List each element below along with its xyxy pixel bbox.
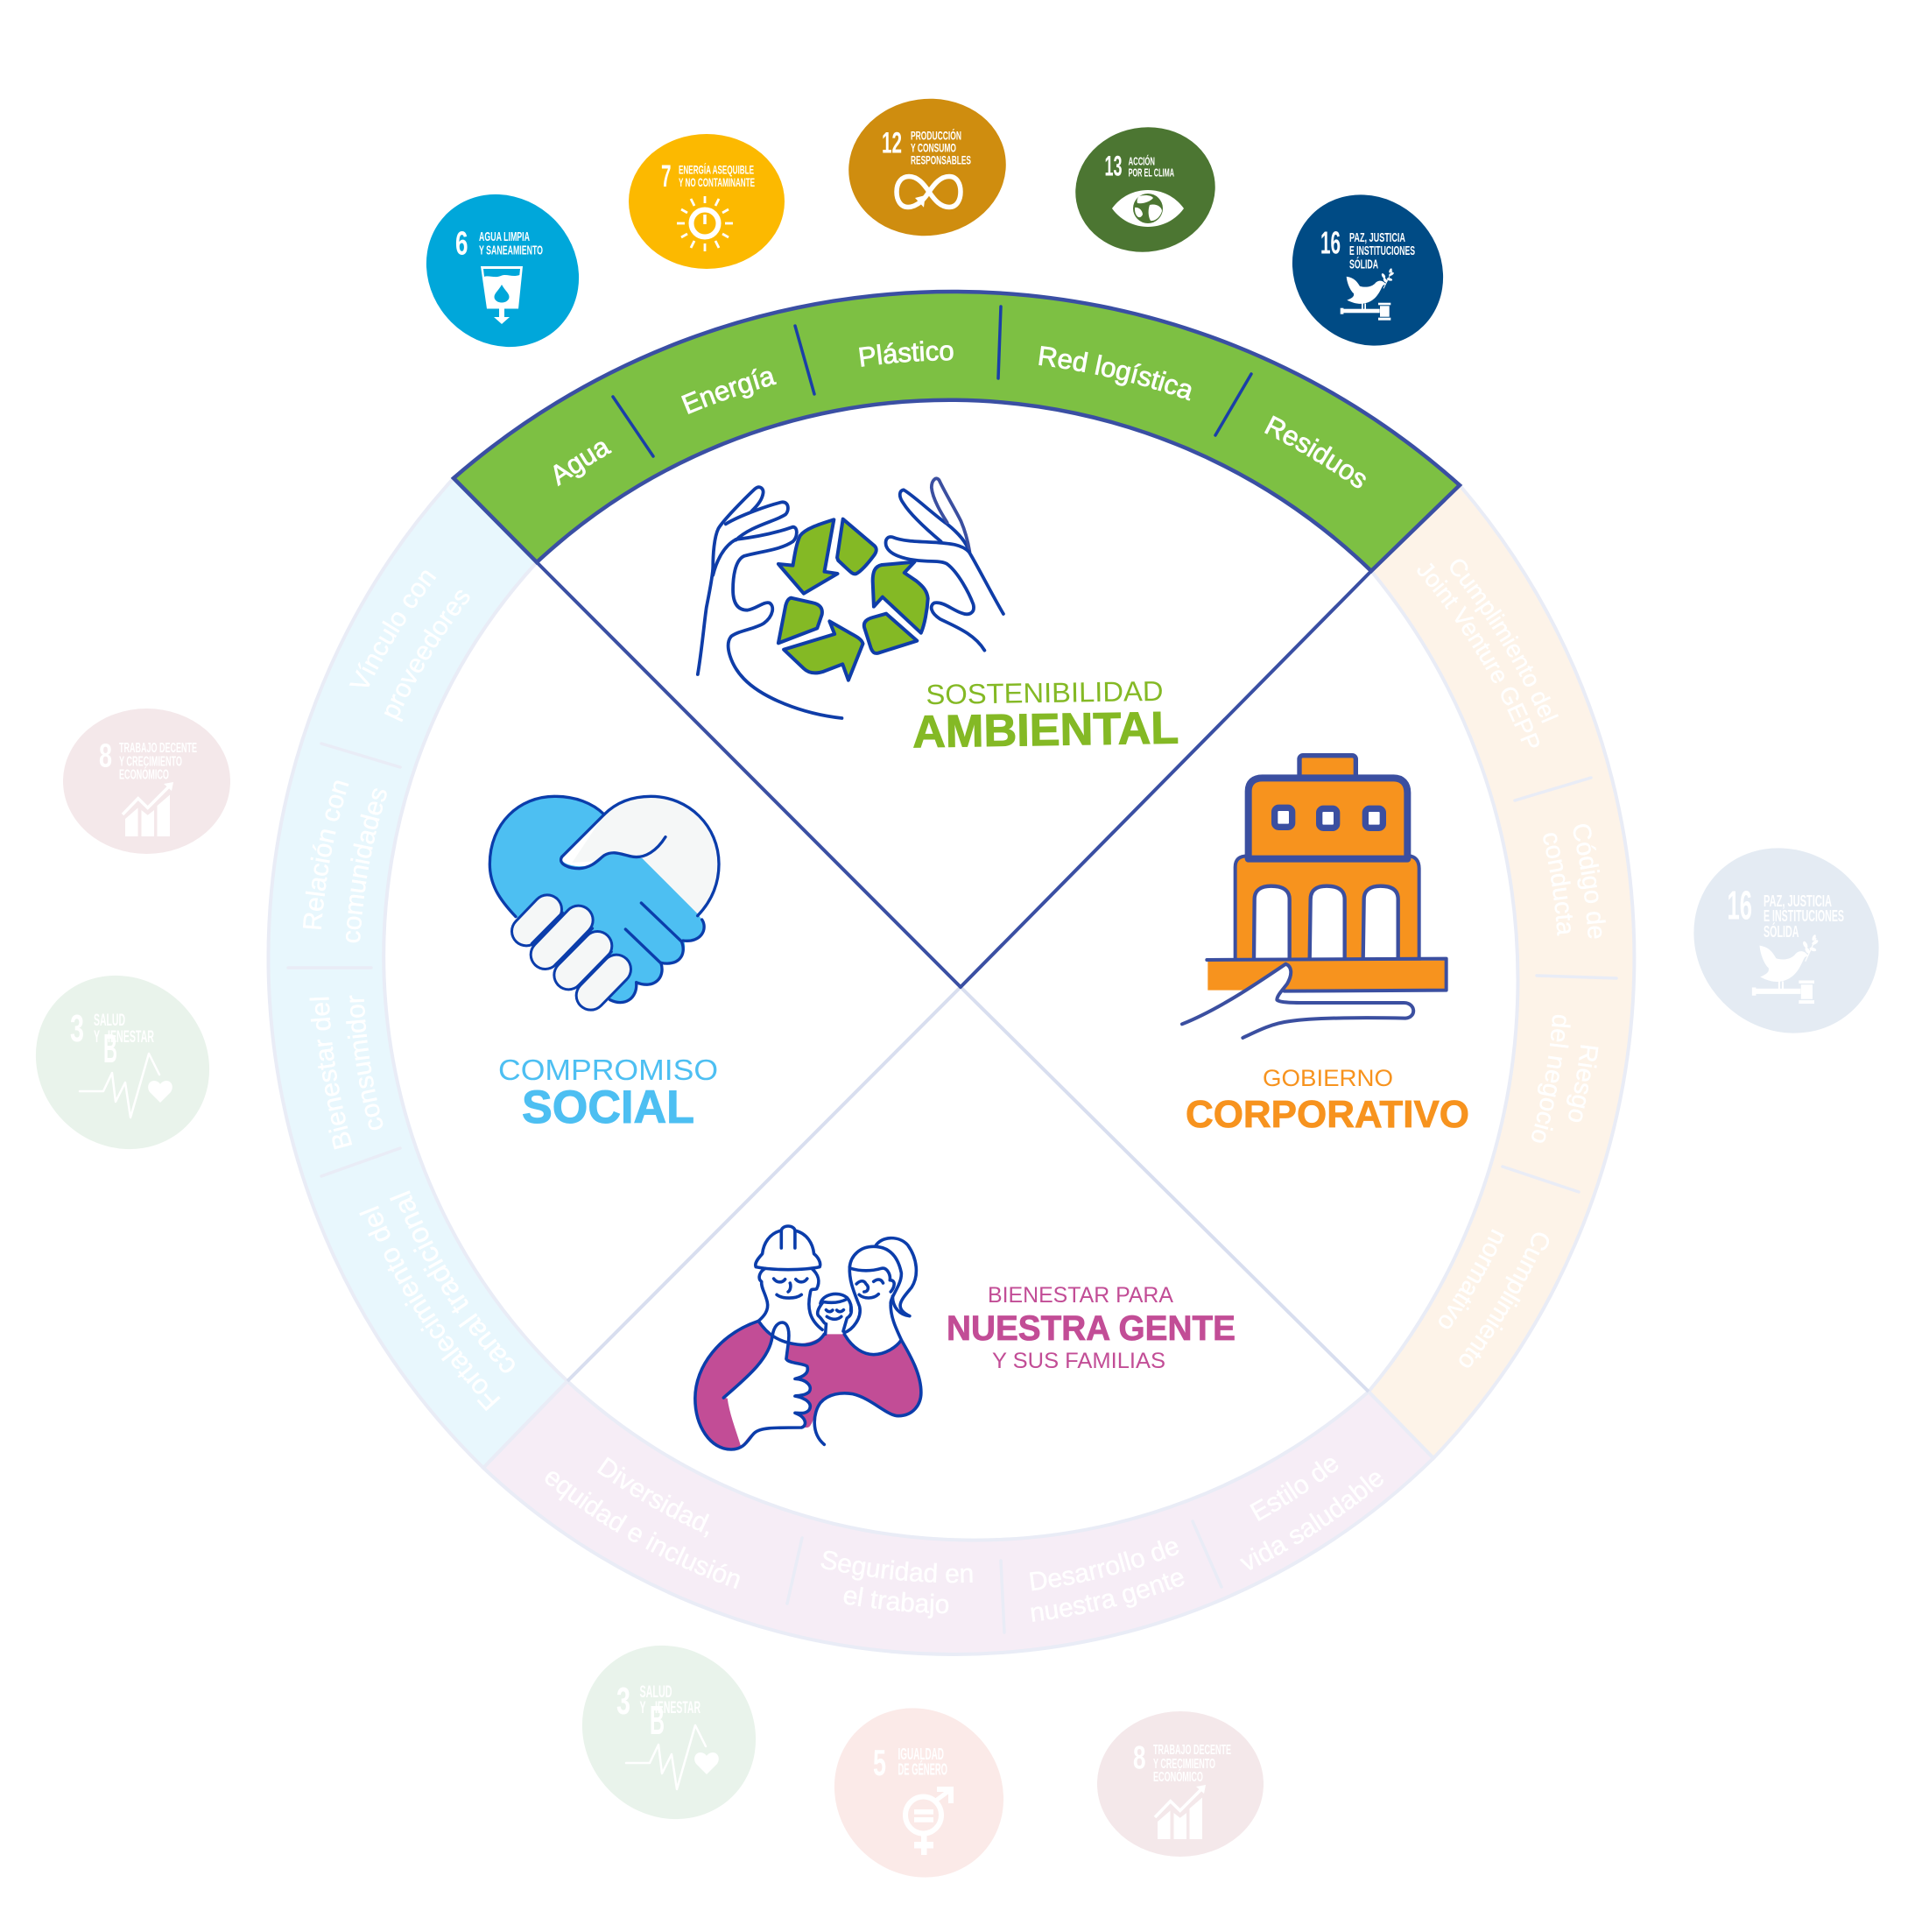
band: gobierno corporativo (faded): Joint Venture GEPP bbox=[1417, 562, 1539, 748]
heading: bienestar para nuestra gente: NUESTRA GENTE bbox=[947, 1309, 1236, 1348]
badge: SDG 8 bottom: ECONÓMICO bbox=[1153, 1768, 1203, 1785]
badge: SDG 7: Y NO CONTAMINANTE bbox=[679, 175, 755, 189]
badge: SDG 13 bbox=[1066, 116, 1225, 263]
recycling arrows bbox=[778, 519, 928, 680]
heading: sostenibilidad ambiental bbox=[912, 675, 1179, 758]
badge: SDG 16 right: PAZ, JUSTICIA bbox=[1764, 892, 1832, 910]
badge: SDG 16: PAZ, JUSTICIA bbox=[1349, 231, 1405, 245]
blue hand bbox=[489, 796, 704, 1003]
illustration: building on a hand bbox=[1182, 756, 1447, 1038]
badge: SDG 6: Y SANEAMIENTO bbox=[479, 243, 543, 257]
band: nuestra gente (faded): equidad e inclusión bbox=[545, 1471, 740, 1589]
gray hand bbox=[572, 796, 719, 916]
badge: SDG 12: RESPONSABLES bbox=[911, 154, 971, 166]
badge: SDG 8 left: ECONÓMICO bbox=[119, 766, 169, 783]
heading: bienestar para nuestra gente bbox=[947, 1283, 1236, 1373]
hands outline bbox=[698, 478, 1003, 718]
band: sostenibilidad ambiental (active): Plástico bbox=[859, 341, 954, 367]
illustration: hands holding recycling arrows bbox=[698, 478, 1003, 718]
heading: compromiso social: COMPROMISO bbox=[498, 1054, 718, 1086]
heading: gobierno corporativo: CORPORATIVO bbox=[1186, 1093, 1469, 1136]
shirts bbox=[695, 1321, 921, 1449]
badge: SDG 7 bbox=[629, 134, 785, 269]
badge: SDG 13: ACCIÓN bbox=[1129, 155, 1155, 168]
badge: SDG 3 bottom: IENESTAR bbox=[655, 1699, 700, 1717]
band: sostenibilidad ambiental (active) bbox=[450, 289, 1462, 574]
tower cap bbox=[1299, 756, 1355, 779]
heading: bienestar para nuestra gente: Y SUS FAMILIAS bbox=[992, 1349, 1165, 1373]
badge: SDG 8 left: Y CRECIMIENTO bbox=[119, 755, 182, 769]
badge: SDG 8 bottom: 8 bbox=[1133, 1739, 1145, 1775]
badge: SDG 16 bbox=[1261, 164, 1475, 377]
illustration: handshake heart bbox=[489, 796, 719, 1003]
badge: SDG 16: E INSTITUCIONES bbox=[1349, 244, 1415, 258]
band: nuestra gente (faded): Diversidad, bbox=[597, 1457, 709, 1538]
badge: SDG 16 right: E INSTITUCIONES bbox=[1764, 907, 1844, 925]
badge: SDG 16 right: 16 bbox=[1727, 883, 1752, 928]
badge: SDG 6: 6 bbox=[455, 226, 468, 263]
badge: SDG 8 left: TRABAJO DECENTE bbox=[119, 741, 197, 756]
badge: SDG 13: POR EL CLIMA bbox=[1129, 167, 1174, 180]
badge: SDG 3 left: B bbox=[103, 1026, 117, 1071]
badge: SDG 7: ENERGÍA ASEQUIBLE bbox=[679, 163, 754, 177]
band: compromiso social (faded): Vínculo con bbox=[348, 571, 436, 687]
band: nuestra gente (faded): nuestra gente bbox=[1031, 1572, 1184, 1622]
band: nuestra gente (faded): Estilo de bbox=[1250, 1458, 1338, 1521]
gray fingers bbox=[526, 909, 616, 996]
SDG badges: active row bbox=[395, 88, 1475, 378]
hand bbox=[1237, 964, 1291, 996]
badge: SDG 3 left: Y bbox=[94, 1028, 100, 1047]
badge: SDG 8 bottom bbox=[1097, 1711, 1264, 1857]
heading: gobierno corporativo: GOBIERNO bbox=[1263, 1065, 1393, 1091]
divider lines: lower quadrants bbox=[567, 987, 1369, 1392]
band: compromiso social (faded) bbox=[266, 478, 567, 1468]
badge: SDG 3 left: 3 bbox=[70, 1007, 84, 1050]
band: sostenibilidad ambiental (active): Energía bbox=[681, 368, 777, 414]
badge: SDG 5 bottom: IGUALDAD bbox=[898, 1745, 944, 1763]
heading: compromiso social bbox=[498, 1054, 718, 1133]
band: nuestra gente (faded): el trabajo bbox=[844, 1587, 949, 1618]
base slab bbox=[1207, 961, 1447, 991]
band: nuestra gente (faded): Desarrollo de bbox=[1030, 1540, 1179, 1590]
band: gobierno corporativo (faded): Riesgo bbox=[1566, 1045, 1599, 1122]
badge: SDG 3 bottom: Y bbox=[639, 1699, 646, 1717]
badge: SDG 5 bottom bbox=[799, 1674, 1038, 1912]
badge: SDG 16 right bbox=[1656, 810, 1917, 1071]
upper building bbox=[1249, 778, 1407, 859]
badge: SDG 12: Y CONSUMO bbox=[911, 142, 956, 155]
band: sostenibilidad ambiental (active): Agua bbox=[553, 441, 612, 487]
family outlines bbox=[695, 1226, 921, 1449]
badge: SDG 3 left bbox=[0, 940, 245, 1185]
arches bbox=[1254, 886, 1398, 960]
band: compromiso social (faded): Bienestar del bbox=[310, 997, 352, 1149]
handshake outlines bbox=[489, 796, 719, 1003]
badge: SDG 13: 13 bbox=[1105, 151, 1123, 182]
band: compromiso social (faded): comunidades bbox=[346, 788, 387, 942]
band: compromiso social (faded): canal tradicional bbox=[390, 1191, 515, 1373]
band: gobierno corporativo (faded): del negocio bbox=[1531, 1015, 1571, 1143]
windows bbox=[1275, 807, 1383, 828]
badge: SDG 3 bottom: B bbox=[650, 1697, 665, 1743]
band: gobierno corporativo (faded): Cumplimiento del bbox=[1450, 559, 1559, 723]
heading: sostenibilidad ambiental: SOSTENIBILIDAD bbox=[926, 675, 1164, 710]
band: compromiso social (faded): Fortalecimiento del bbox=[359, 1206, 501, 1411]
badge: SDG 5 bottom: 5 bbox=[873, 1742, 886, 1783]
band: gobierno corporativo (faded): Código de bbox=[1573, 824, 1606, 939]
badge: SDG 16 right: SÓLIDA bbox=[1764, 922, 1799, 941]
band: nuestra gente (faded): vida saludable bbox=[1240, 1473, 1383, 1570]
heading: gobierno corporativo bbox=[1186, 1065, 1469, 1136]
badge: SDG 8 left: 8 bbox=[99, 737, 112, 774]
illustration: worker and family bbox=[695, 1226, 921, 1449]
badge: SDG 6 bbox=[395, 163, 610, 378]
heading: compromiso social: SOCIAL bbox=[522, 1082, 694, 1133]
badge: SDG 12: PRODUCCIÓN bbox=[911, 130, 961, 143]
band: nuestra gente (faded) bbox=[483, 1381, 1433, 1656]
badge: SDG 6: AGUA LIMPIA bbox=[479, 229, 530, 244]
band: sostenibilidad ambiental (active): Red logística bbox=[1038, 346, 1191, 401]
badge: SDG 8 bottom: TRABAJO DECENTE bbox=[1153, 1743, 1231, 1758]
band: gobierno corporativo (faded): Cumplimiento bbox=[1459, 1233, 1549, 1368]
badge: SDG 3 left: SALUD bbox=[94, 1012, 125, 1030]
badge: SDG 3 bottom: SALUD bbox=[639, 1683, 672, 1702]
badge: SDG 8 bottom: Y CRECIMIENTO bbox=[1153, 1757, 1215, 1772]
SDG badges: faded bbox=[0, 709, 1917, 1912]
badge: SDG 12: 12 bbox=[882, 126, 902, 159]
badge: SDG 16: SÓLIDA bbox=[1349, 256, 1378, 271]
band: gobierno corporativo (faded): conducta bbox=[1543, 833, 1573, 935]
badge: SDG 3 bottom: 3 bbox=[616, 1680, 630, 1723]
divider lines: upper quadrant bbox=[537, 562, 1371, 987]
band: compromiso social (faded): Relación con bbox=[303, 781, 348, 929]
finger separators bbox=[532, 913, 611, 987]
band: compromiso social (faded): proveedores bbox=[384, 590, 469, 722]
band: compromiso social (faded): consumidor bbox=[346, 995, 384, 1130]
badge: SDG 3 left: IENESTAR bbox=[108, 1028, 154, 1047]
band: sostenibilidad ambiental (active): Residuos bbox=[1264, 415, 1366, 489]
badge: SDG 8 left bbox=[63, 709, 230, 854]
band: gobierno corporativo (faded) bbox=[1369, 485, 1636, 1458]
badge: SDG 5 bottom: DE GÉNERO bbox=[898, 1760, 947, 1779]
badge: SDG 12 bbox=[840, 88, 1015, 246]
heading: bienestar para nuestra gente: BIENESTAR PARA bbox=[988, 1283, 1173, 1308]
thumb bbox=[723, 1322, 810, 1446]
lower building bbox=[1236, 856, 1419, 960]
band: nuestra gente (faded): Seguridad en bbox=[821, 1550, 972, 1583]
badge: SDG 7: 7 bbox=[661, 159, 671, 194]
badge: SDG 3 bottom bbox=[546, 1610, 792, 1855]
badge: SDG 16: 16 bbox=[1320, 225, 1341, 261]
band: gobierno corporativo (faded): normativo bbox=[1439, 1230, 1504, 1329]
wheel ring: four pillar bands bbox=[266, 256, 1636, 1656]
heading: sostenibilidad ambiental: AMBIENTAL bbox=[912, 703, 1179, 758]
